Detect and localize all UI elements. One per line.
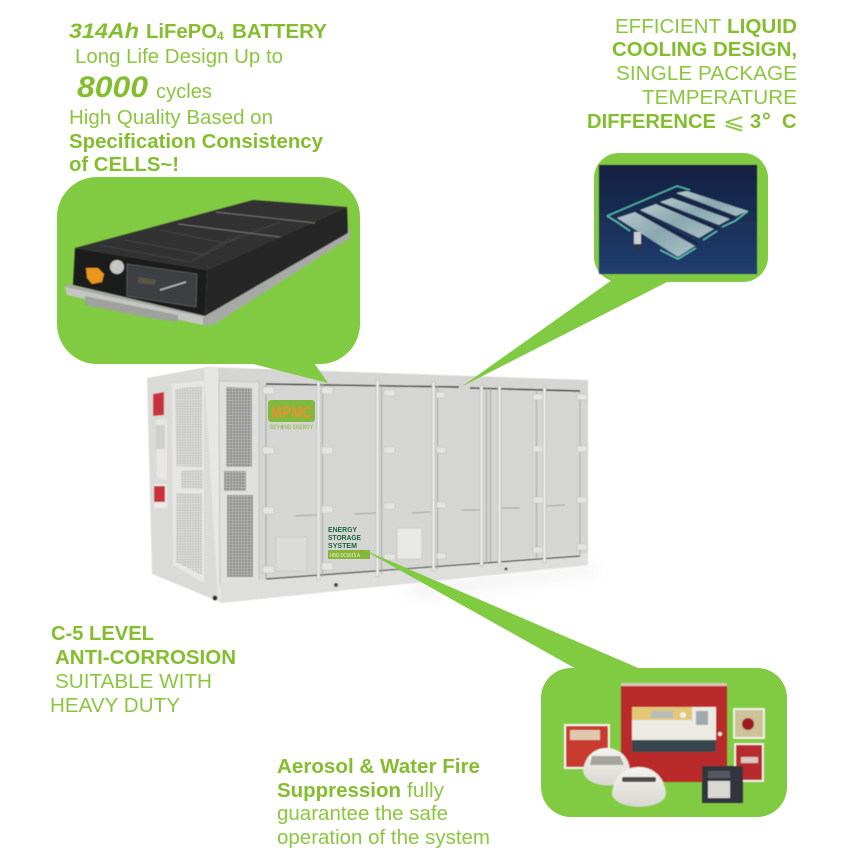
icon: battery module <box>65 200 350 325</box>
container label: Energy Storage System: HBD-DC5015 A <box>330 553 360 559</box>
container label: Energy Storage System <box>328 525 370 559</box>
text block: battery: Long Life Design Up to <box>75 46 283 68</box>
text block: anti-corrosion: ANTI-CORROSION <box>55 647 236 669</box>
container label: Energy Storage System: ENERGY <box>328 525 357 534</box>
text block: liquid cooling: 3 <box>750 111 761 133</box>
text block: fire suppression: Suppression <box>277 780 401 802</box>
text block: anti-corrosion: SUITABLE WITH <box>55 671 212 693</box>
container label: Energy Storage System: SYSTEM <box>328 541 357 550</box>
logo: MPMC Beyond Energy: BEY◉ND ENERGY <box>270 423 313 431</box>
text block: battery: High Quality Based on <box>69 107 273 129</box>
text block: fire suppression: Aerosol & Water Fire <box>277 756 480 778</box>
text block: fire suppression: fully <box>407 780 444 802</box>
text block: battery: cycles <box>156 81 212 103</box>
text block: battery: LiFePO <box>146 21 217 43</box>
text block: battery: 8000 <box>77 71 148 104</box>
text block: anti-corrosion: C-5 LEVEL <box>51 623 154 645</box>
callout: battery bubble <box>57 177 360 383</box>
text block: battery <box>69 20 328 176</box>
text block: anti-corrosion <box>50 623 236 717</box>
text block: liquid cooling: LIQUID <box>727 16 797 38</box>
text block: liquid cooling <box>587 16 797 135</box>
text block: battery: 4 <box>217 29 224 43</box>
text block: liquid cooling: EFFICIENT <box>615 16 721 38</box>
text block: liquid cooling: ° <box>762 108 771 133</box>
text block: battery: 314Ah <box>69 20 139 43</box>
text block: liquid cooling: ⩽ <box>723 110 745 135</box>
container label: Energy Storage System: STORAGE <box>328 533 361 542</box>
icon: liquid cooling plates <box>599 165 757 274</box>
text block: battery: BATTERY <box>232 21 328 43</box>
callout: fire suppression bubble <box>362 549 787 817</box>
text block: fire suppression <box>277 756 490 849</box>
text block: fire suppression: operation of the system <box>277 827 490 849</box>
text block: anti-corrosion: HEAVY DUTY <box>50 695 180 717</box>
text block: liquid cooling: C <box>782 111 796 133</box>
logo: MPMC Beyond Energy <box>268 400 315 431</box>
text block: liquid cooling: TEMPERATURE <box>642 87 797 109</box>
text block: battery: of CELLS~! <box>69 154 179 176</box>
text block: battery: Specification Consistency <box>69 131 324 153</box>
text block: fire suppression: guarantee the safe <box>277 803 448 825</box>
container: energy storage cabinet <box>147 367 600 603</box>
logo: MPMC Beyond Energy: MPMC <box>271 403 312 422</box>
text block: liquid cooling: DIFFERENCE <box>587 111 716 133</box>
icon: fire alarm equipment <box>564 683 765 807</box>
text block: liquid cooling: COOLING DESIGN, <box>612 39 797 61</box>
text block: liquid cooling: SINGLE PACKAGE <box>616 63 797 85</box>
callout: liquid cooling bubble <box>461 153 768 387</box>
